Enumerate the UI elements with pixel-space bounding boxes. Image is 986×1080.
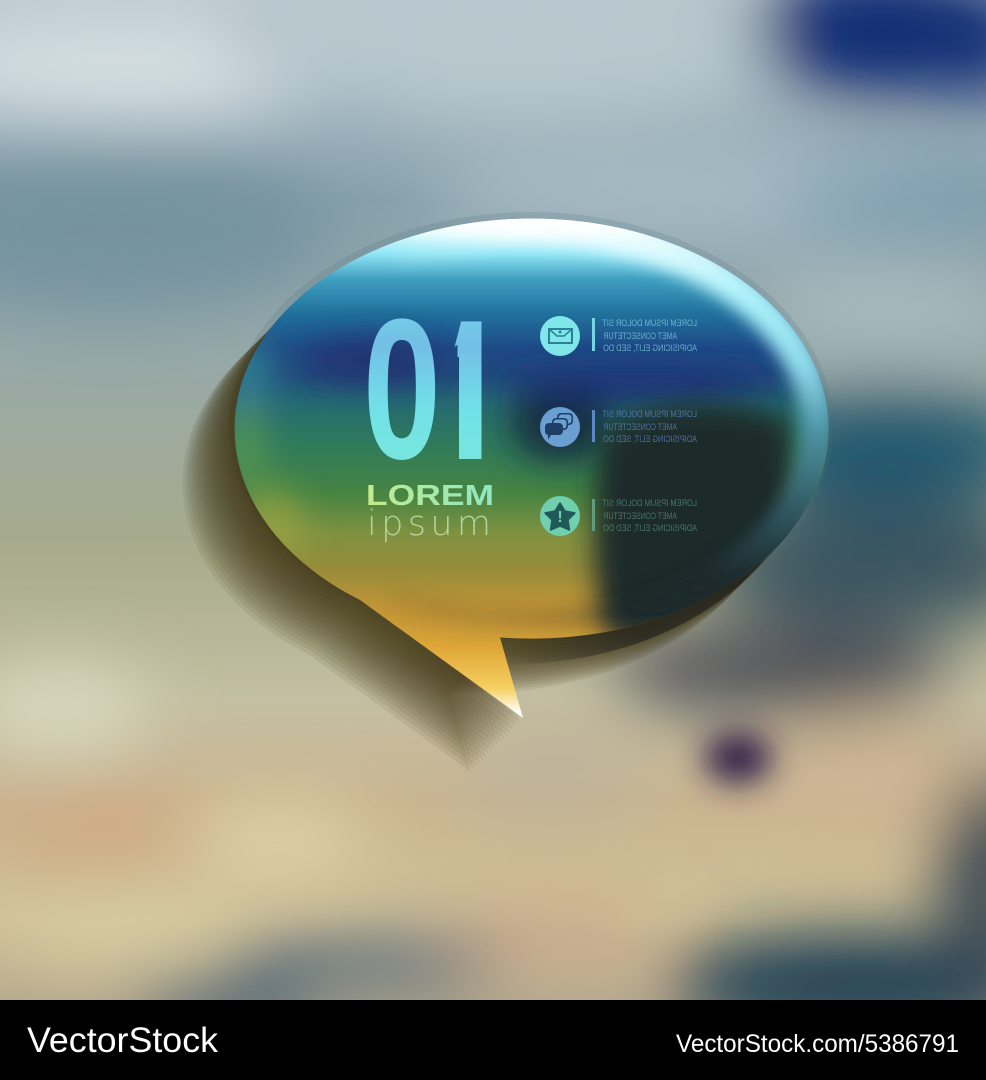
icon: star with exclamation — [540, 496, 580, 536]
divider bar — [592, 318, 595, 351]
divider bar — [592, 410, 595, 442]
footer image id: VectorStock.com/5386791 — [676, 1030, 959, 1058]
mirrored text lines — [602, 409, 697, 444]
speech bubble — [180, 200, 860, 772]
stepped drop shadow of the bubble — [183, 223, 825, 772]
dark glass region at lower right — [594, 404, 800, 640]
mirrored text lines: ADIPISICING ELIT, SED DO — [603, 343, 697, 353]
mirrored text lines: AMET CONSECTETUR — [603, 511, 677, 521]
glowing inner rim — [402, 218, 828, 638]
list item: star alert — [540, 496, 697, 536]
darker crescent shadow at lower right — [214, 228, 808, 664]
digit one: 1 — [416, 279, 516, 502]
mirrored text lines — [602, 498, 697, 533]
mirrored text lines: ADIPISICING ELIT, SED DO — [603, 434, 697, 444]
list item: chat — [540, 407, 697, 447]
mirrored text lines: LOREM IPSUM DOLOR SIT — [602, 409, 697, 419]
bubble body with colour washes — [234, 218, 828, 718]
footer logo text: VectorStock — [27, 1021, 219, 1060]
list item: mail — [540, 316, 697, 356]
mirrored text lines: ADIPISICING ELIT, SED DO — [603, 523, 697, 533]
mirrored text lines: AMET CONSECTETUR — [603, 331, 677, 341]
icon: speech bubbles — [540, 407, 580, 447]
mirrored text lines — [602, 318, 697, 353]
icon: star with exclamation: ! — [557, 509, 563, 526]
heading: LOREM: LOREM — [366, 480, 494, 512]
digit zero: 0 — [363, 277, 441, 501]
subheading: ipsum: ipsum — [367, 504, 491, 544]
outer faint halo — [229, 212, 833, 640]
divider bar — [592, 499, 595, 531]
mirrored text lines: LOREM IPSUM DOLOR SIT — [602, 498, 697, 508]
mirrored text lines: LOREM IPSUM DOLOR SIT — [602, 318, 697, 328]
big number 01 — [368, 318, 482, 460]
icon: envelope — [540, 316, 580, 356]
top white highlight — [419, 218, 635, 241]
footer bar — [0, 1000, 986, 1080]
mirrored text lines: AMET CONSECTETUR — [603, 422, 677, 432]
